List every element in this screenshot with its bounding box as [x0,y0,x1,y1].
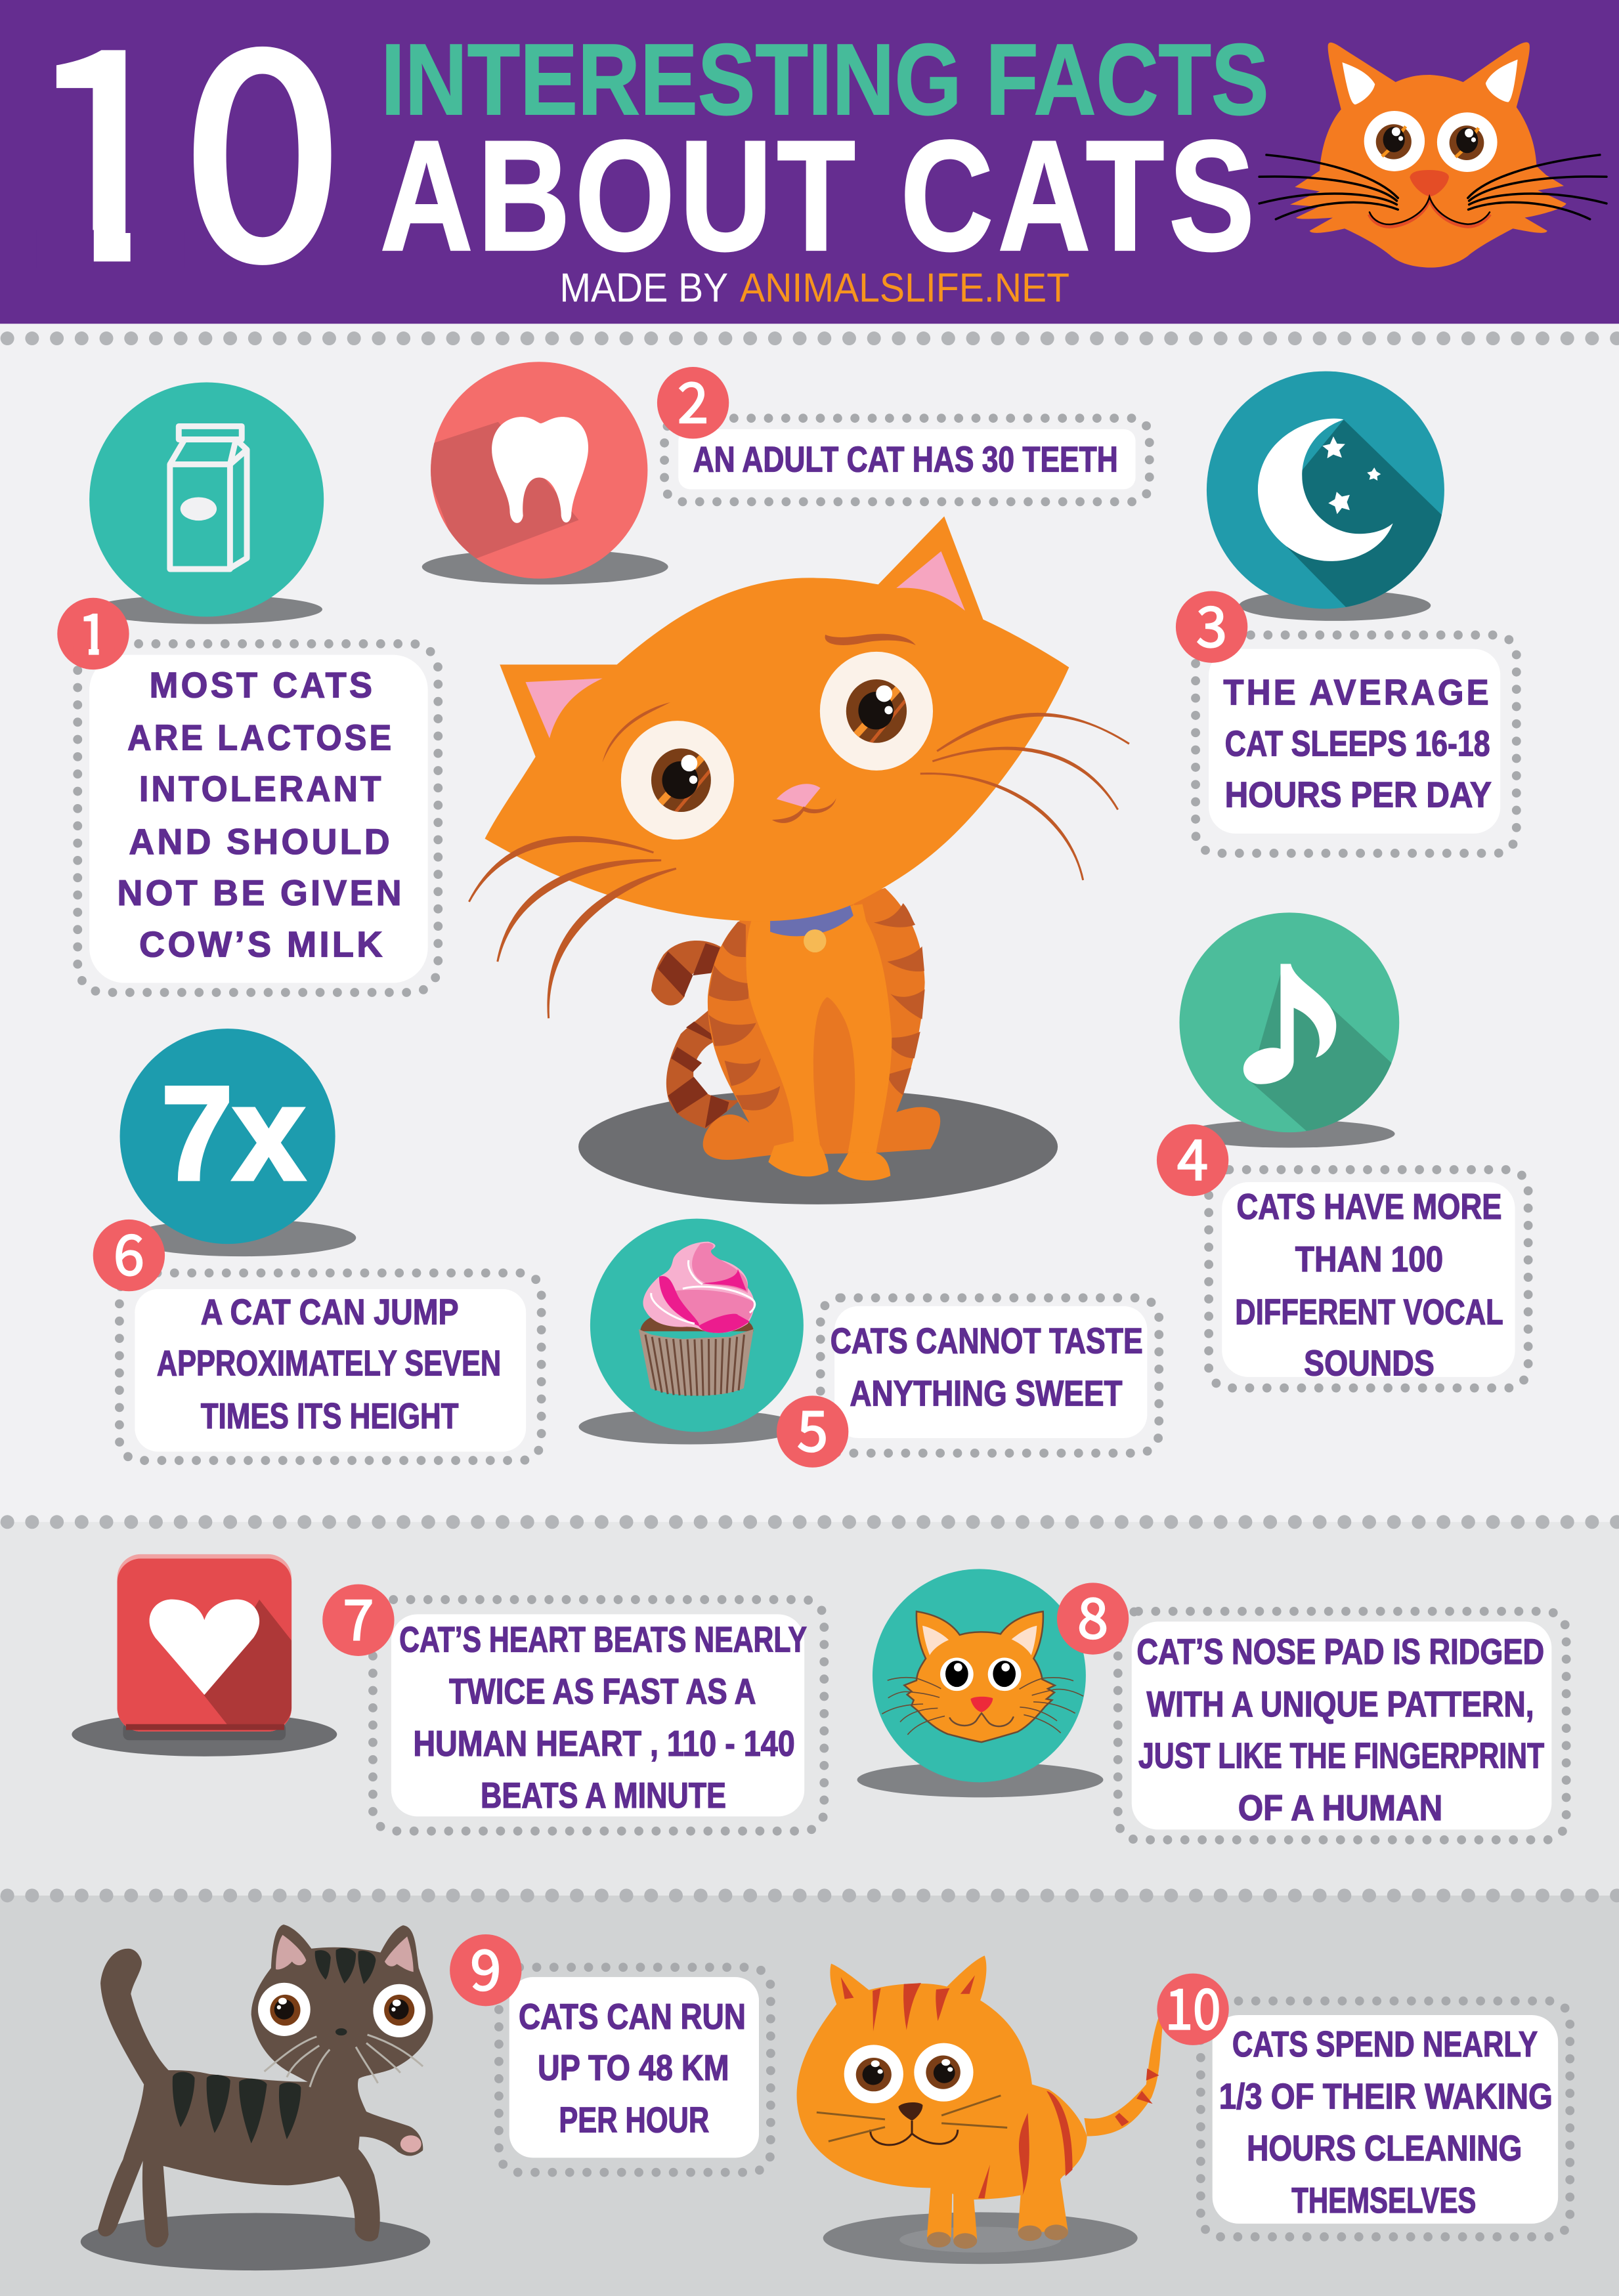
callout: lactose text box: MOST CATS [150,665,375,705]
front chest and legs [746,904,892,1181]
panel: fact 6 [93,1029,542,1460]
callout: lactose text box: INTOLERANT [139,769,384,809]
callout: running speed text box: CATS CAN RUN [519,1997,746,2037]
back body [703,888,940,1160]
number badge 2 [657,359,729,439]
callout: vocal sounds text box [1209,1170,1528,1388]
icon: heart tile [72,1554,337,1756]
number badge 9: 9 [470,1926,501,2007]
callout: grooming text box [1201,2001,1570,2237]
icon: seven times [120,1029,356,1256]
number badge 7: 7 [343,1576,374,1656]
callout: heart beat text box [373,1600,824,1831]
callout: sleep text box: CAT SLEEPS 16-18 [1225,724,1490,764]
callout: lactose text box [77,644,438,992]
nose, mouth and whiskers [817,2096,1007,2145]
number badge 5: 5 [797,1388,828,1468]
callout: jump text box: APPROXIMATELY SEVEN [157,1344,501,1384]
callout: teeth text box: AN ADULT CAT HAS 30 TEETH [693,440,1118,480]
right eye [820,652,933,771]
callout: lactose text box: AND SHOULD [129,822,393,862]
callout: jump text box: A CAT CAN JUMP [201,1292,459,1332]
number badge 6 [93,1212,165,1292]
callout: heart beat text box: CAT’S HEART BEATS NEARLY [399,1619,807,1659]
number badge 10: 10 [1165,1965,1220,2045]
callout: running speed text box [499,1967,771,2173]
callout: taste text box [821,1298,1159,1453]
number badge 6: 6 [114,1212,144,1292]
callout: vocal sounds text box: DIFFERENT VOCAL [1235,1292,1503,1332]
callout: grooming text box: THEMSELVES [1291,2180,1476,2221]
panel: fact 1 [57,382,438,992]
callout: taste text box: ANYTHING SWEET [850,1374,1122,1414]
number badge 9 [450,1926,521,2007]
eyes [844,2043,974,2103]
callout: nose pad text box [1118,1611,1566,1840]
callout: jump text box [119,1273,542,1460]
callout: lactose text box: ARE LACTOSE [127,718,394,758]
callout: sleep text box: THE AVERAGE [1223,672,1492,712]
number badge 1: 1 [77,590,108,670]
title: interesting facts: INTERESTING FACTS [381,23,1269,136]
callout: running speed text box: UP TO 48 KM [538,2048,729,2088]
icon: moon and stars [1207,372,1446,621]
panel: fact 2 [418,359,1150,584]
credit line: ANIMALSLIFE.NET [740,265,1069,311]
panel: fact 4 [1157,912,1528,1388]
panel: fact 7 [72,1554,824,1831]
callout: lactose text box: NOT BE GIVEN [118,873,404,913]
icon: tooth [418,362,668,584]
icon: music note [1179,912,1406,1164]
icon: cupcake [579,1219,804,1444]
number badge 2: 2 [678,359,708,439]
number badge 5 [777,1388,848,1468]
callout: vocal sounds text box: CATS HAVE MORE [1237,1187,1501,1227]
number badge 4 [1157,1116,1228,1197]
collar and bell [770,904,853,952]
legs [927,2178,1068,2240]
callout: heart beat text box: TWICE AS FAST AS A [449,1671,756,1711]
number badge 8: 8 [1077,1575,1108,1655]
header banner [0,0,1619,339]
callout: nose pad text box: WITH A UNIQUE PATTERN, [1147,1684,1534,1724]
panel: fact 9 [450,1926,771,2173]
number badge 4: 4 [1177,1116,1208,1197]
callout: sleep text box: HOURS PER DAY [1225,775,1492,815]
callout: vocal sounds text box: SOUNDS [1304,1344,1435,1384]
callout: running speed text box: PER HOUR [559,2100,709,2140]
callout: teeth text box [664,418,1150,501]
callout: taste text box: CATS CANNOT TASTE [831,1321,1143,1361]
panel: fact 5 [579,1219,1159,1468]
callout: heart beat text box: BEATS A MINUTE [481,1775,726,1816]
illustration: central orange cat [469,517,1129,1204]
icon: seven times: 7x [161,1059,305,1208]
callout: heart beat text box: HUMAN HEART , 110 - 140 [413,1724,795,1764]
panel: fact 8 [857,1569,1566,1840]
body stripes [708,903,925,1111]
title: about cats: ABOUT CATS [380,108,1259,284]
number badge 1 [57,590,129,670]
callout: nose pad text box: OF A HUMAN [1238,1788,1442,1828]
tail [651,941,741,1129]
callout: sleep text box [1196,635,1517,853]
number badge 7 [322,1576,395,1656]
icon: milk carton [89,382,324,624]
callout: grooming text box: HOURS CLEANING [1247,2129,1522,2169]
callout: vocal sounds text box: THAN 100 [1295,1239,1443,1279]
callout: grooming text box: CATS SPEND NEARLY [1232,2024,1538,2064]
callout: jump text box: TIMES ITS HEIGHT [201,1396,459,1436]
panel: fact 10 [1157,1965,1570,2237]
tail [1084,2014,1163,2136]
callout: lactose text box: COW’S MILK [139,924,385,964]
illustration: brown tabby cat [81,1924,433,2270]
icon: header cat face [1259,42,1607,268]
brows, nose, mouth, whiskers [469,634,1129,1018]
illustration: orange striped cat [797,1955,1163,2264]
left eye [621,721,734,840]
icon: cat face circle [857,1569,1103,1797]
number badge 3: 3 [1196,583,1227,663]
head [485,517,1069,921]
callout: nose pad text box: CAT’S NOSE PAD IS RIDGED [1136,1632,1544,1672]
credit line: MADE BY [559,265,728,311]
number badge 3 [1176,583,1247,663]
callout: grooming text box: 1/3 OF THEIR WAKING [1219,2076,1553,2116]
head and body [797,1955,1087,2200]
number badge 8 [1057,1575,1129,1655]
panel: fact 3 [1176,372,1517,853]
